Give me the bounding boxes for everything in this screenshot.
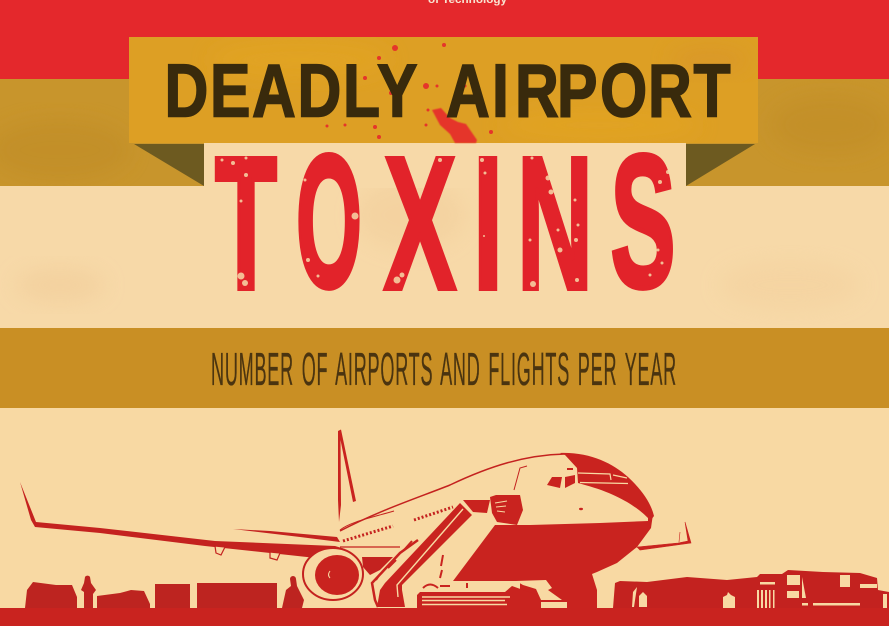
cargo container wide: [197, 583, 277, 608]
tail fin: [338, 430, 356, 522]
baggage tractor: [97, 590, 150, 608]
nose detail: [579, 508, 583, 510]
windscreen outlines: [578, 473, 628, 484]
ground strip: [0, 608, 889, 626]
left wing with winglet: [20, 482, 345, 558]
title banner: [129, 37, 758, 143]
parchment behind title ribbon: [204, 143, 686, 188]
fuel cart: [25, 582, 77, 608]
heading: toxins: X: [384, 118, 456, 330]
band: lower cream scene: [0, 408, 889, 626]
heading: toxins: I: [473, 118, 503, 330]
door highlights: [495, 501, 507, 512]
band: upper ochre stripe: [0, 79, 889, 188]
wing flap fairings: [215, 546, 280, 560]
underwing shadow: [362, 557, 393, 575]
heading: toxins: T: [215, 118, 277, 330]
red belly: [453, 514, 653, 608]
ground worker two: [282, 576, 304, 608]
cargo container large: [155, 584, 190, 608]
toxins distress specks: [220, 156, 670, 287]
fuselage belly line: [340, 546, 400, 548]
red roof and nose: [560, 453, 654, 524]
boarding door: [490, 495, 523, 525]
cockpit side windows: [547, 468, 575, 488]
fuselage top line: [340, 454, 565, 531]
stair door connector: [463, 500, 490, 513]
far side stabilizer: [233, 529, 340, 542]
forward cargo door line: [514, 466, 527, 490]
ground equipment: left: [25, 576, 304, 608]
heading: toxins: O: [296, 116, 362, 328]
passenger windows: [343, 507, 453, 541]
heading: toxins: S: [610, 116, 676, 328]
heading: toxins: [215, 116, 676, 330]
band: subtitle ochre stripe: [0, 328, 889, 409]
heading: deadly airport: DEADLY AIRPORT: [164, 49, 731, 133]
band: red header: [0, 0, 889, 80]
blood splatter: [326, 43, 493, 143]
ground equipment: right trucks: [613, 570, 889, 608]
fuselage cheat line: [340, 511, 394, 530]
heading: toxins: N: [517, 118, 593, 330]
far wing tip: [637, 522, 691, 550]
ground worker: [81, 576, 96, 608]
engine: [303, 548, 363, 600]
band: parchment: [0, 186, 889, 188]
ribbon fold: left: [134, 144, 204, 186]
boarding stairs: [372, 503, 472, 607]
ribbon fold: right: [686, 144, 755, 186]
stair truck body: [417, 580, 567, 608]
airplane: [20, 430, 691, 608]
